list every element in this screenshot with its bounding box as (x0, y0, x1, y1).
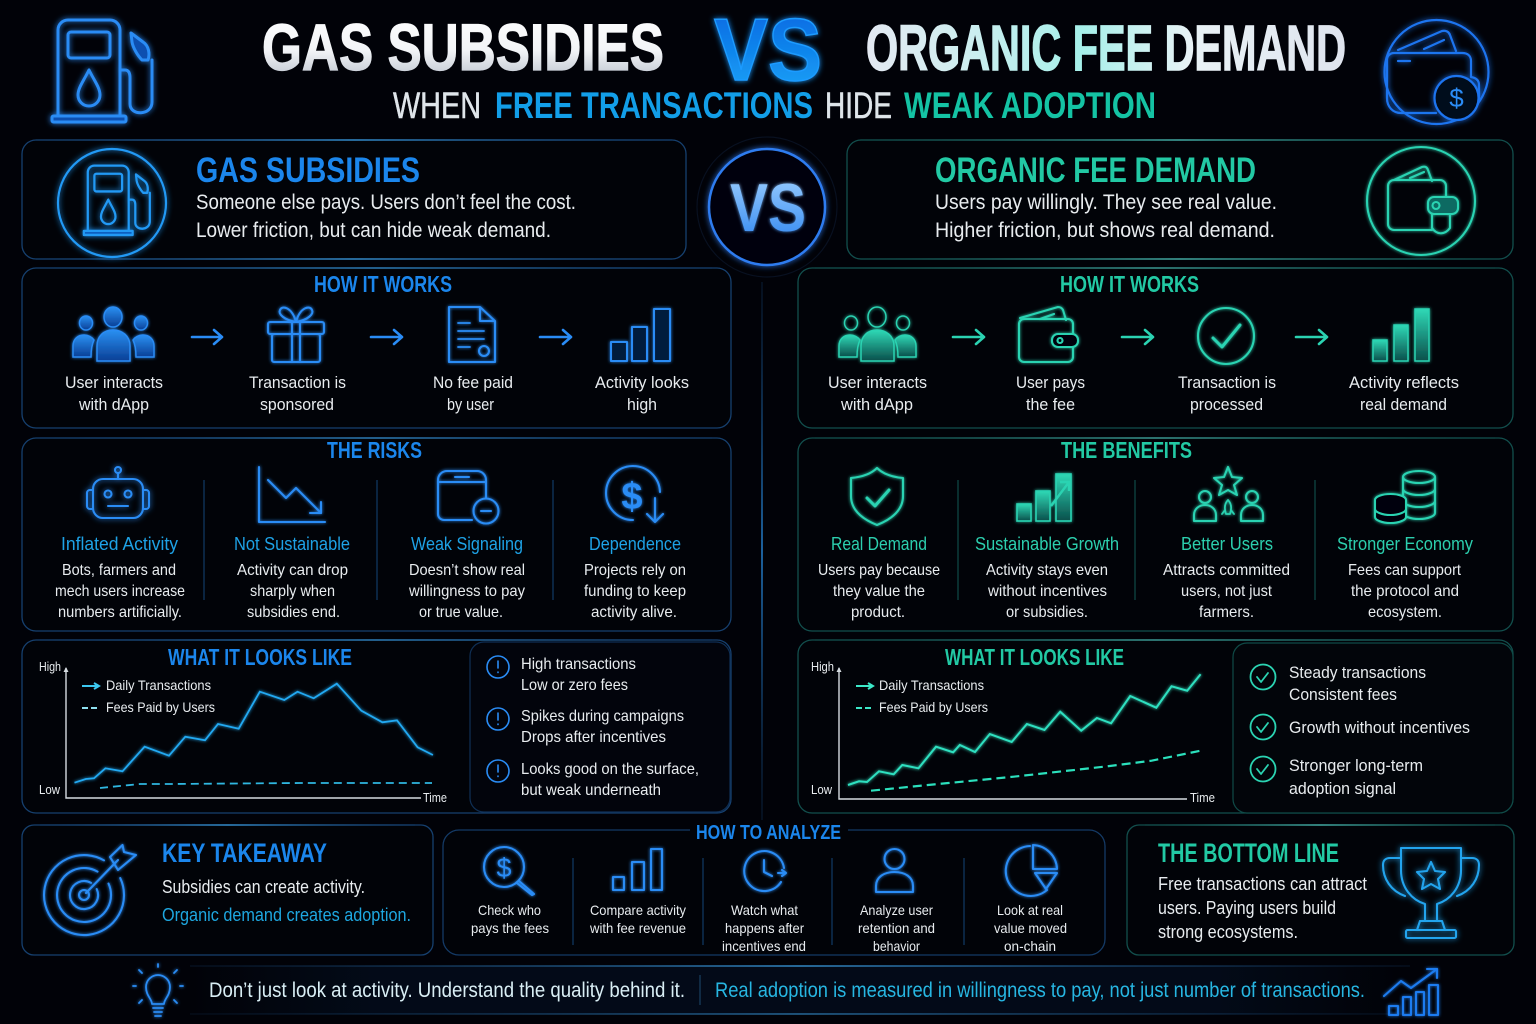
step: activity reflects demand: Activity reflects (1349, 373, 1459, 392)
callout: warning signs: Low or zero fees (521, 677, 628, 694)
line chart: Low (39, 783, 61, 797)
panel: what it looks like (organic) (798, 639, 1513, 813)
text: strong ecosystems. (1158, 922, 1298, 942)
icon: pump in circle (58, 149, 166, 257)
line chart: Time (423, 791, 447, 805)
benefit: better users: farmers. (1199, 604, 1254, 621)
step: check who pays: $ (496, 853, 512, 883)
step: transaction sponsored: Transaction is (249, 373, 346, 392)
risk: not sustainable: Activity can drop (237, 562, 348, 579)
heading: THE BENEFITS (1061, 437, 1192, 463)
step: check who pays: Check who (478, 902, 541, 918)
icon: target with arrow (44, 845, 136, 935)
step: watch after incentives: Watch what (731, 902, 798, 918)
footer text right: Real adoption is measured in willingness to pay, not just number of transactions. (715, 979, 1365, 1002)
risk: not sustainable: subsidies end. (247, 604, 340, 621)
risk: not sustainable: sharply when (250, 583, 335, 600)
panel: the bottom line (1127, 824, 1514, 955)
benefit: sustainable growth: or subsidies. (1006, 604, 1088, 621)
benefit: better users: users, not just (1181, 583, 1272, 600)
icon: wallet in circle (1367, 147, 1475, 255)
callout: warning signs: but weak underneath (521, 782, 661, 799)
step: activity reflects demand: real demand (1360, 395, 1447, 414)
line chart: High (811, 660, 834, 674)
step: user interacts: User interacts (65, 373, 163, 392)
risk: dependence: activity alive. (591, 604, 677, 621)
arrow (371, 330, 402, 344)
step: analyze retention: behavior (873, 938, 920, 954)
callout: positive signs (1233, 643, 1513, 813)
step: analyze retention: retention and (858, 920, 935, 936)
panel: the benefits (798, 437, 1513, 631)
benefit: real demand (818, 468, 940, 621)
step: transaction processed: Transaction is (1178, 373, 1276, 392)
subtitle: WEAK ADOPTION (904, 85, 1156, 126)
icon: light bulb (133, 964, 183, 1016)
step: user interacts: User interacts (828, 373, 927, 392)
step: no fee paid (433, 307, 513, 414)
callout: warning signs: Spikes during campaigns (521, 708, 684, 725)
step: user pays: User pays (1016, 373, 1085, 392)
panel: how to analyze (443, 821, 1105, 955)
heading: HOW IT WORKS (1060, 271, 1199, 297)
heading: WHAT IT LOOKS LIKE (945, 644, 1124, 670)
footer text left: Don’t just look at activity. Understand the quality behind it. (209, 979, 685, 1002)
step: watch after incentives (722, 851, 806, 954)
icon: trophy (1383, 848, 1479, 938)
risk: weak signaling: Weak Signaling (411, 533, 523, 554)
benefit: real demand: Real Demand (831, 533, 927, 554)
step: compare activity: Compare activity (590, 902, 686, 918)
callout: positive signs: adoption signal (1289, 779, 1396, 798)
step: real value pie: on-chain (1004, 938, 1056, 954)
step: transaction sponsored: sponsored (260, 395, 334, 414)
icon: header fuel pump (52, 20, 152, 122)
callout: positive signs: Consistent fees (1289, 685, 1397, 704)
callout: warning signs (470, 642, 730, 812)
footer banner (133, 964, 1438, 1016)
benefit: real demand: product. (851, 604, 905, 621)
heading: KEY TAKEAWAY (162, 838, 327, 868)
step: user interacts: with dApp (78, 395, 149, 414)
risk: inflated activity (55, 467, 185, 621)
text: Organic demand creates adoption. (162, 905, 411, 925)
line chart: Fees Paid by Users (106, 699, 215, 715)
subtitle (393, 85, 1156, 126)
heading: GAS SUBSIDIES (196, 151, 420, 190)
risk: inflated activity: Inflated Activity (61, 533, 179, 554)
badge: vs circle: VS (730, 170, 806, 246)
heading: THE BOTTOM LINE (1158, 838, 1339, 868)
callout: positive signs: Stronger long-term (1289, 756, 1423, 775)
line chart (39, 660, 447, 805)
badge: vs circle (697, 137, 837, 277)
subtitle: FREE TRANSACTIONS (495, 85, 813, 126)
arrow (1122, 330, 1153, 344)
step: analyze retention (858, 849, 935, 954)
step: user interacts (828, 307, 927, 414)
text: users. Paying users build (1158, 898, 1336, 918)
step: compare activity: with fee revenue (589, 920, 686, 936)
line chart: Daily Transactions (879, 677, 984, 693)
text (1158, 874, 1367, 942)
panel: key takeaway (22, 824, 433, 955)
arrow (192, 330, 222, 344)
benefit: sustainable growth: Activity stays even (986, 562, 1108, 579)
step: user interacts (65, 307, 163, 414)
step: compare activity (589, 849, 686, 936)
step: activity looks high: high (627, 395, 657, 414)
callout: warning signs: Looks good on the surface, (521, 761, 699, 778)
subtitle: WHEN (393, 85, 481, 126)
icon: header wallet with coin: $ (1449, 83, 1464, 113)
callout: warning signs: Drops after incentives (521, 729, 666, 746)
callout: positive signs: Growth without incentives (1289, 718, 1470, 737)
icon: growth chart (1384, 969, 1438, 1015)
risk: dependence: Dependence (589, 533, 681, 554)
benefit: stronger economy: ecosystem. (1368, 604, 1442, 621)
heading: HOW TO ANALYZE (696, 821, 841, 844)
step: real value pie: Look at real (997, 902, 1063, 918)
risk: weak signaling (408, 471, 525, 621)
step: no fee paid: No fee paid (433, 373, 513, 392)
risk: dependence: $ (621, 476, 643, 518)
benefit: sustainable growth (975, 474, 1119, 621)
step: real value pie (994, 845, 1067, 954)
description: Higher friction, but shows real demand. (935, 219, 1275, 242)
benefit: real demand: they value the (833, 583, 925, 600)
benefit: stronger economy: Fees can support (1348, 562, 1462, 579)
step: transaction processed: processed (1190, 395, 1263, 414)
callout: positive signs: Steady transactions (1289, 663, 1426, 682)
step: watch after incentives: incentives end (722, 938, 806, 954)
step: analyze retention: Analyze user (860, 902, 933, 918)
benefit: stronger economy: the protocol and (1351, 583, 1459, 600)
panel: the risks (22, 437, 731, 631)
risk: dependence (584, 466, 686, 621)
step: user interacts: with dApp (840, 395, 913, 414)
step: check who pays: pays the fees (471, 920, 549, 936)
line chart: Time (1190, 791, 1215, 805)
step: check who pays (471, 847, 549, 936)
description (935, 191, 1277, 242)
description (196, 191, 576, 242)
benefit: real demand: Users pay because (818, 562, 940, 579)
benefit: stronger economy (1337, 471, 1474, 621)
callout: warning signs: High transactions (521, 656, 636, 673)
step: no fee paid: by user (447, 395, 494, 414)
step: activity looks high: Activity looks (595, 373, 689, 392)
line chart (811, 660, 1215, 805)
line chart: Low (811, 783, 833, 797)
benefit: better users: Attracts committed (1163, 562, 1290, 579)
description: Lower friction, but can hide weak demand. (196, 219, 551, 242)
benefit: better users (1163, 467, 1290, 621)
description: Someone else pays. Users don’t feel the cost. (196, 191, 576, 214)
title: vs: VS (714, 0, 822, 99)
panel: how it works (organic) (798, 267, 1513, 428)
line chart: High (39, 660, 61, 674)
heading: WHAT IT LOOKS LIKE (168, 644, 352, 670)
risk: dependence: Projects rely on (584, 562, 686, 579)
step: activity looks high (595, 309, 689, 414)
line chart: Daily Transactions (106, 677, 211, 693)
risk: weak signaling: or true value. (419, 604, 503, 621)
step: real value pie: value moved (994, 920, 1067, 936)
subtitle: HIDE (825, 85, 892, 126)
panel: what it looks like (gas) (22, 639, 731, 813)
text: Subsidies can create activity. (162, 877, 365, 897)
step: activity reflects demand (1349, 309, 1459, 414)
risk: weak signaling: Doesn’t show real (409, 562, 525, 579)
step: transaction processed (1178, 308, 1276, 414)
benefit: sustainable growth: Sustainable Growth (975, 533, 1119, 554)
text (162, 877, 411, 925)
heading: THE RISKS (327, 437, 422, 463)
panel: organic fee demand header (847, 139, 1513, 260)
line chart: Fees Paid by Users (879, 699, 988, 715)
step: watch after incentives: happens after (725, 920, 804, 936)
title: gas subsidies: GAS SUBSIDIES (262, 10, 664, 84)
benefit: better users: Better Users (1181, 533, 1273, 554)
risk: weak signaling: willingness to pay (408, 583, 525, 600)
benefit: stronger economy: Stronger Economy (1337, 533, 1474, 554)
step: user pays: the fee (1026, 395, 1075, 414)
risk: not sustainable: Not Sustainable (234, 533, 350, 554)
arrow (953, 330, 984, 344)
text: Free transactions can attract (1158, 874, 1367, 894)
heading: HOW IT WORKS (314, 271, 452, 297)
icon: header wallet with coin (1384, 20, 1488, 124)
arrow (1296, 330, 1327, 344)
heading: ORGANIC FEE DEMAND (935, 151, 1256, 190)
arrow (540, 330, 571, 344)
benefit: sustainable growth: without incentives (987, 583, 1107, 600)
risk: inflated activity: mech users increase (55, 583, 185, 600)
description: Users pay willingly. They see real value. (935, 191, 1277, 214)
risk: dependence: funding to keep (584, 583, 686, 600)
risk: inflated activity: Bots, farmers and (62, 562, 176, 579)
panel: how it works (gas) (22, 267, 731, 428)
step: user pays (1016, 307, 1085, 414)
panel: gas subsidies header (22, 139, 686, 260)
step: transaction sponsored (249, 308, 346, 414)
center divider (761, 282, 763, 820)
risk: inflated activity: numbers artificially. (58, 604, 182, 621)
risk: not sustainable (234, 467, 350, 621)
